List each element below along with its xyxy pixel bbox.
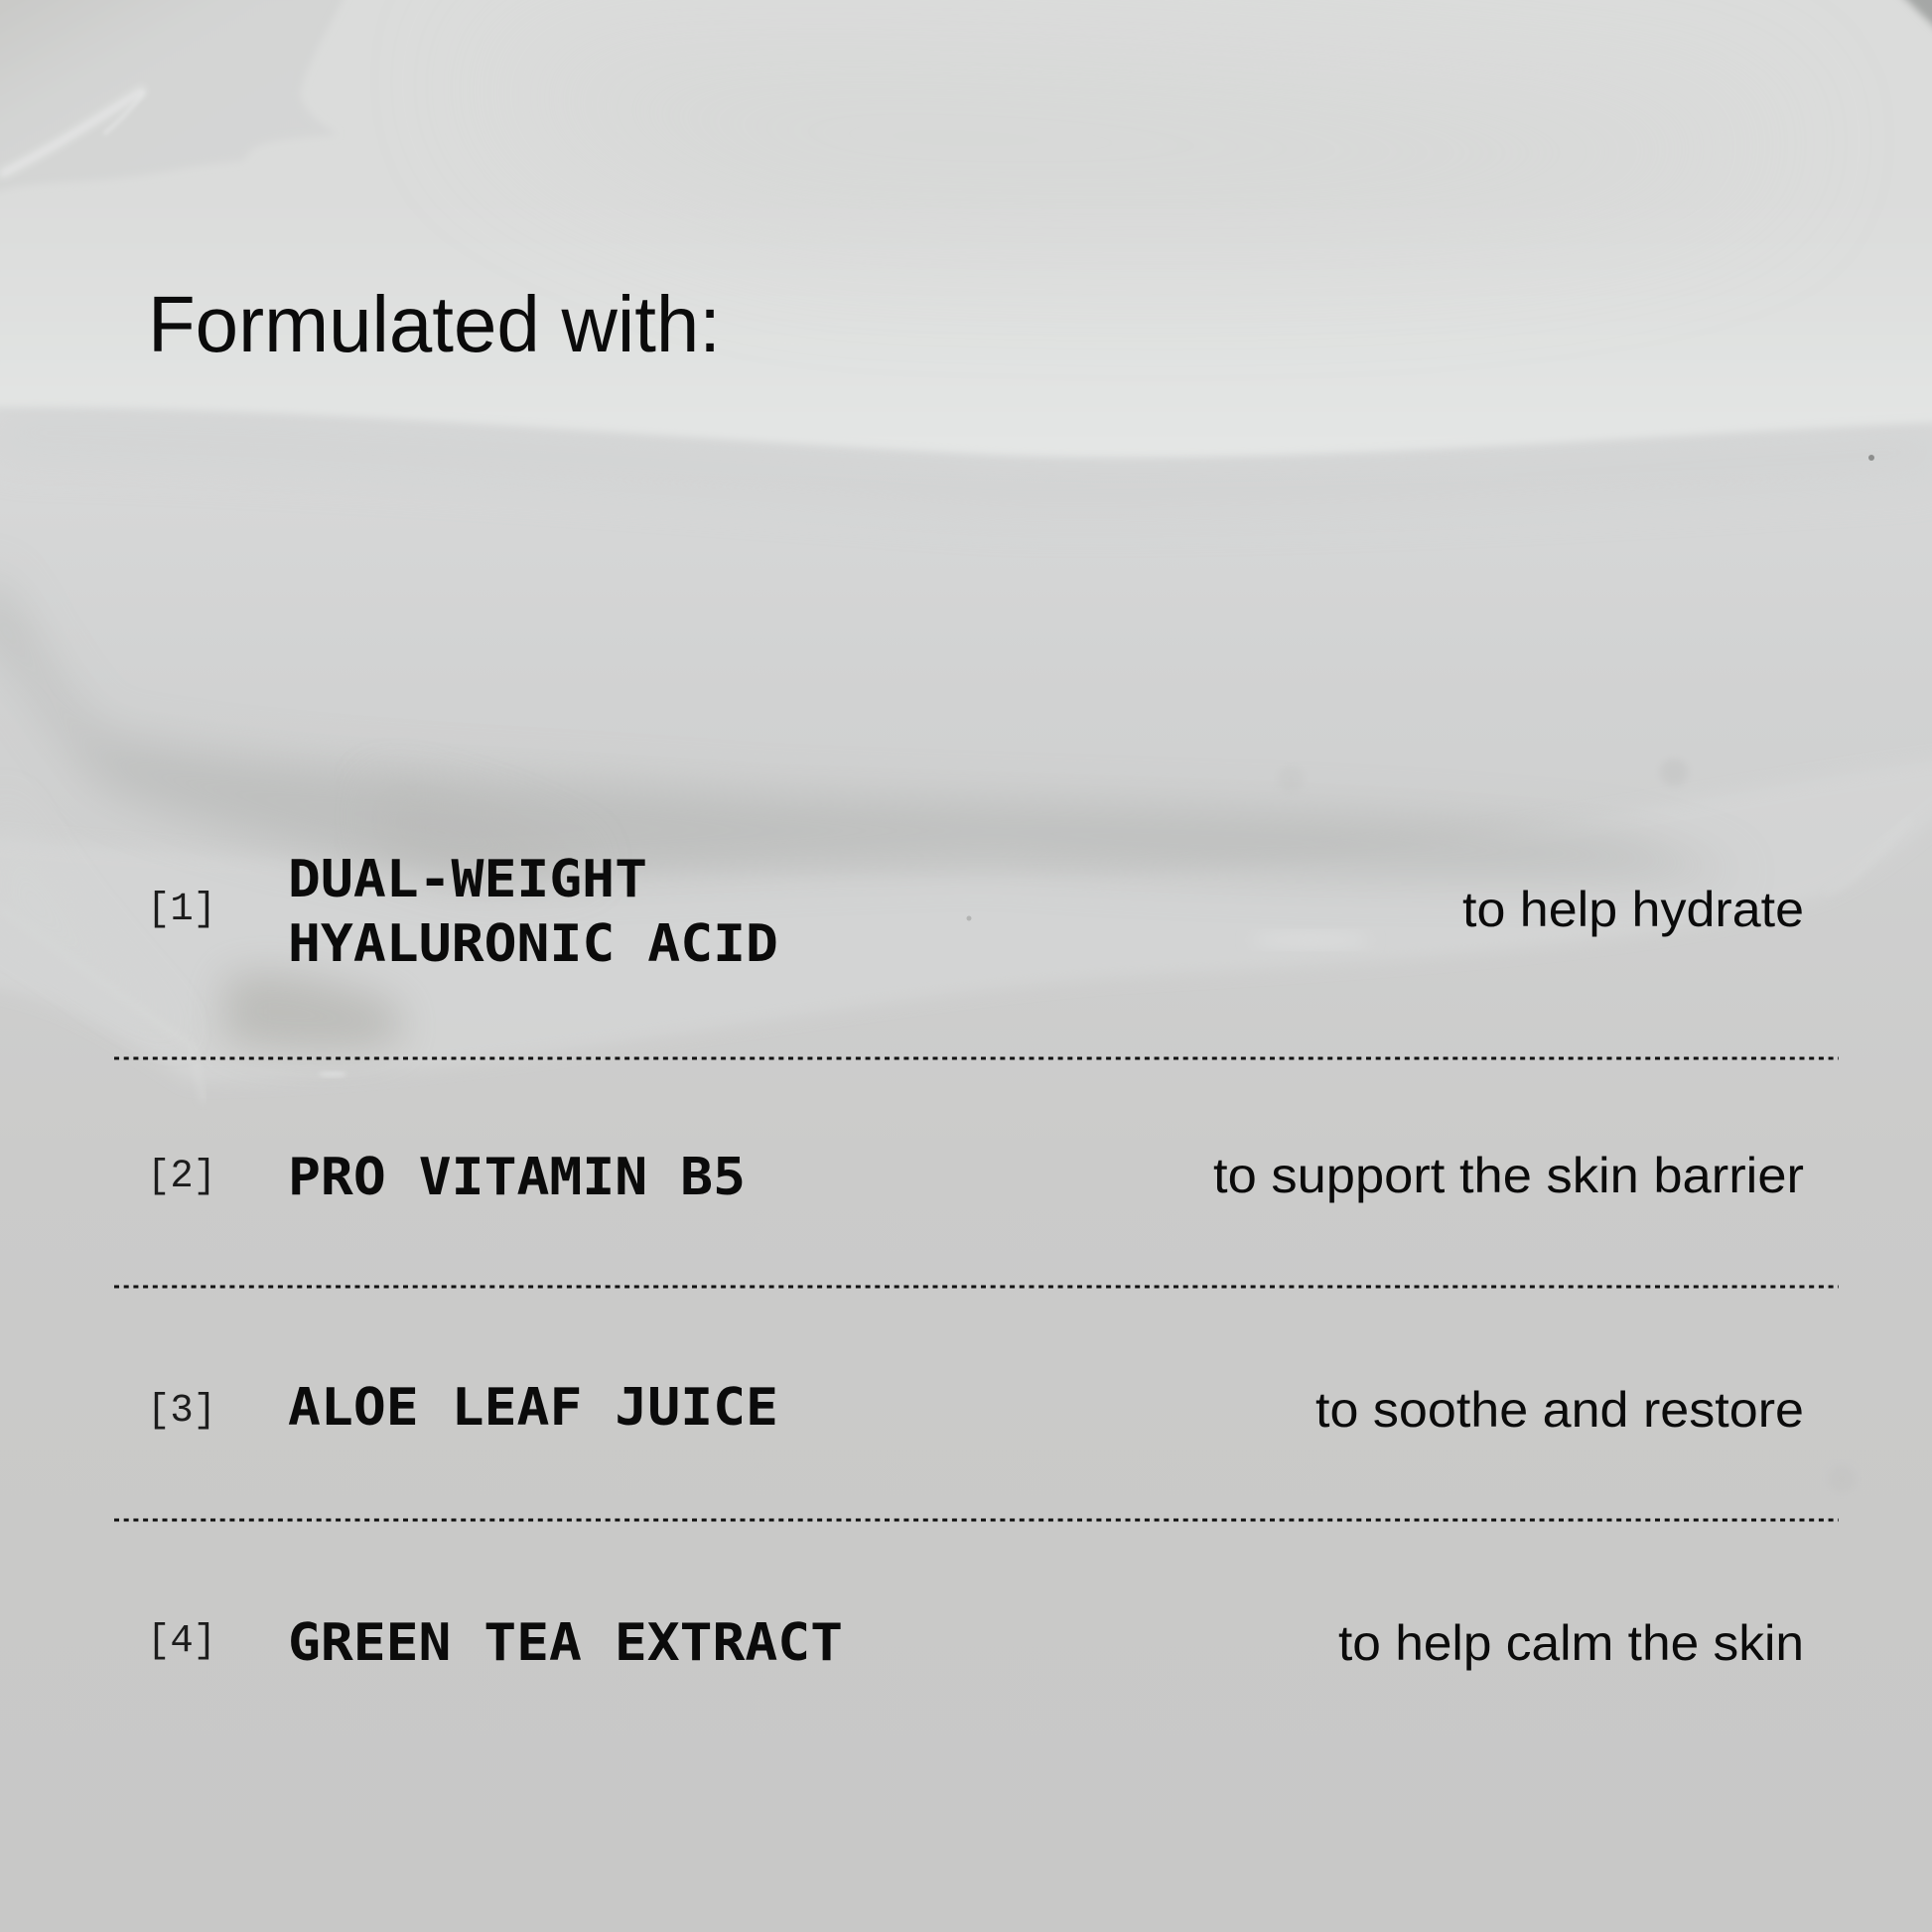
benefit 3: to soothe and restore bbox=[1315, 1382, 1804, 1438]
ingredient name 1 second line: HYALURONIC ACID bbox=[288, 914, 778, 974]
ingredient name 4: GREEN TEA EXTRACT bbox=[288, 1613, 843, 1673]
divider 1 bbox=[114, 1056, 1839, 1060]
number 1: [1] bbox=[147, 888, 216, 932]
row 4: green tea extract bbox=[147, 1613, 1804, 1673]
benefit 4: to help calm the skin bbox=[1338, 1615, 1804, 1671]
row 3: aloe leaf juice bbox=[147, 1378, 1804, 1438]
divider 2 bbox=[114, 1285, 1839, 1289]
row 1: dual-weight hyaluronic acid bbox=[147, 850, 1804, 974]
heading: Formulated with: bbox=[148, 280, 721, 368]
ingredient name 1: DUAL-WEIGHT bbox=[288, 850, 647, 909]
row 2: pro vitamin b5 bbox=[147, 1148, 1804, 1207]
benefit 2: to support the skin barrier bbox=[1213, 1148, 1804, 1203]
number 2: [2] bbox=[147, 1155, 216, 1199]
number 3: [3] bbox=[147, 1389, 216, 1434]
ingredient name 2: PRO VITAMIN B5 bbox=[288, 1148, 746, 1207]
benefit 1: to help hydrate bbox=[1462, 882, 1804, 937]
number 4: [4] bbox=[147, 1619, 216, 1664]
ingredient name 3: ALOE LEAF JUICE bbox=[288, 1378, 778, 1438]
divider 3 bbox=[114, 1519, 1839, 1521]
